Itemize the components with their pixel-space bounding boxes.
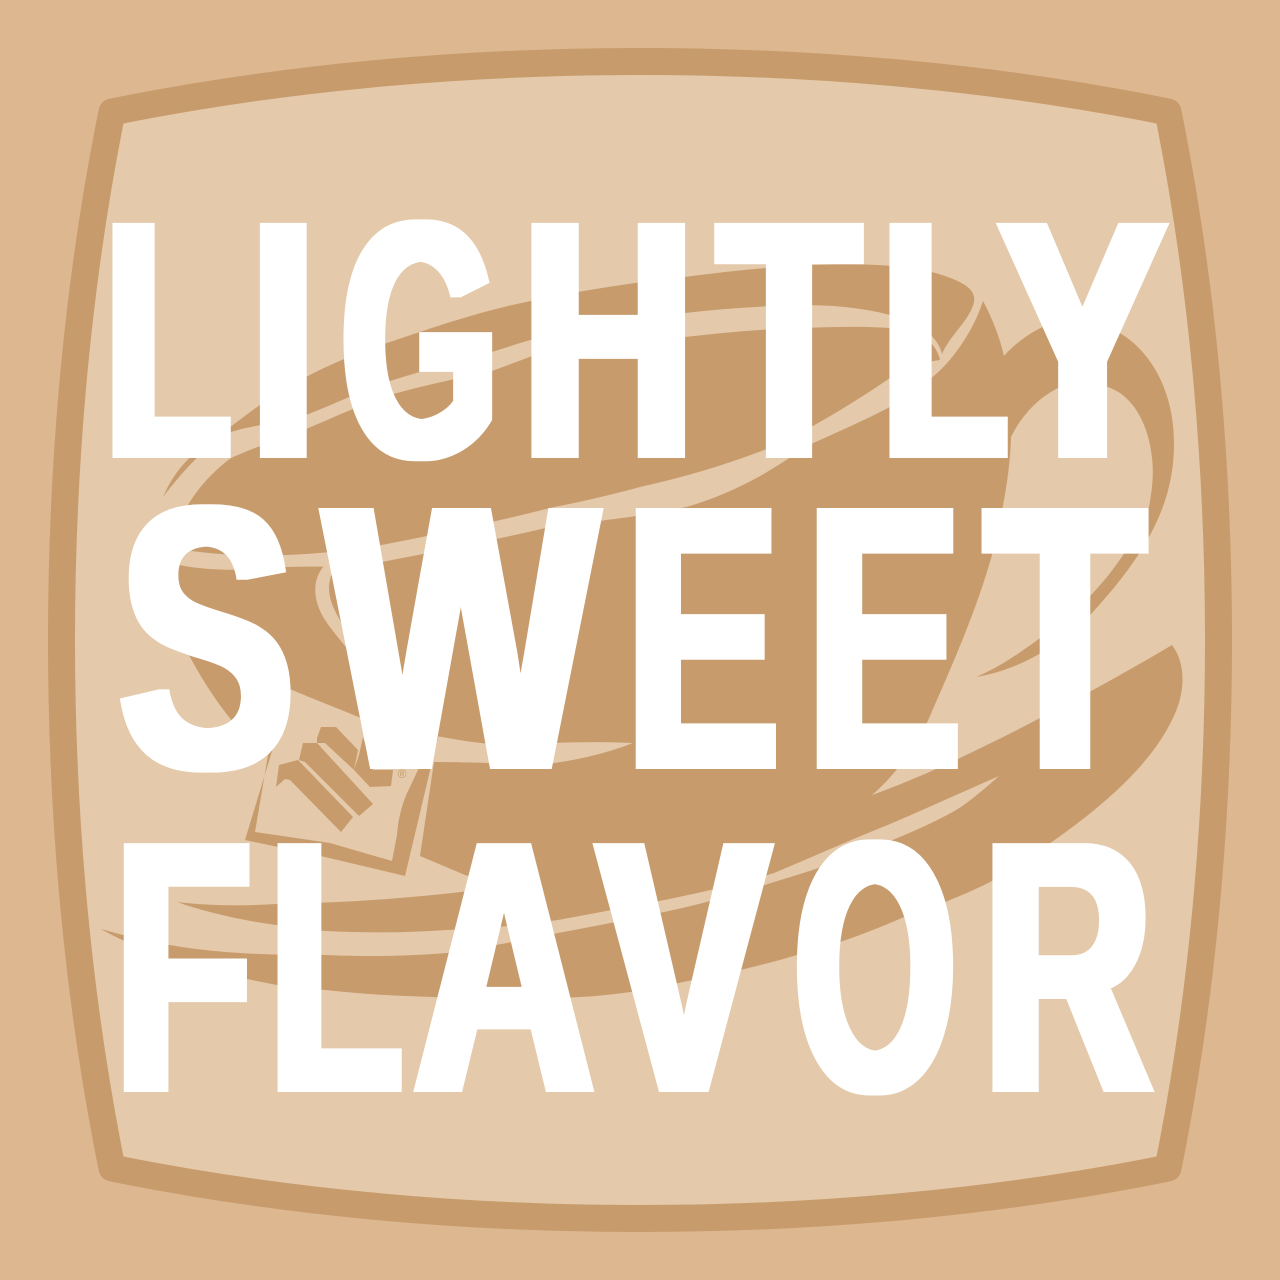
registered mark: ® <box>398 767 407 781</box>
light crescent inside cup <box>315 565 352 652</box>
heading line: FLAVOR: F <box>115 769 251 1166</box>
heading line: LIGHTLY: T <box>718 153 860 528</box>
tilted tag outline <box>245 720 442 876</box>
heading line: FLAVOR: R <box>983 769 1152 1166</box>
heading line: SWEET: S <box>119 430 294 847</box>
heading: lightly sweet flavor <box>105 153 1166 1166</box>
heading line: LIGHTLY: H <box>522 153 695 528</box>
heading line: SWEET: E <box>627 430 779 847</box>
heading line: SWEET: E <box>808 430 961 847</box>
heading line: FLAVOR: L <box>269 769 402 1166</box>
tag emblem stripes <box>276 727 393 832</box>
heading line: SWEET: W <box>325 430 600 847</box>
icon: coffee cup and saucer logo <box>101 264 1183 999</box>
heading line: FLAVOR: V <box>598 769 771 1166</box>
heading line: LIGHTLY: L <box>105 153 231 528</box>
cup body, handle and saucer <box>101 301 1183 999</box>
heading line: FLAVOR: O <box>794 769 956 1166</box>
heading line: LIGHTLY: L <box>882 153 1008 528</box>
upper swoosh band <box>163 264 974 497</box>
coffee surface <box>176 327 940 555</box>
heading line: SWEET: T <box>985 430 1145 847</box>
heading line: LIGHTLY: Y <box>999 153 1166 528</box>
heading line: FLAVOR: A <box>414 769 594 1166</box>
heading line: LIGHTLY: G <box>341 153 498 528</box>
heading line: LIGHTLY: I <box>250 153 316 528</box>
